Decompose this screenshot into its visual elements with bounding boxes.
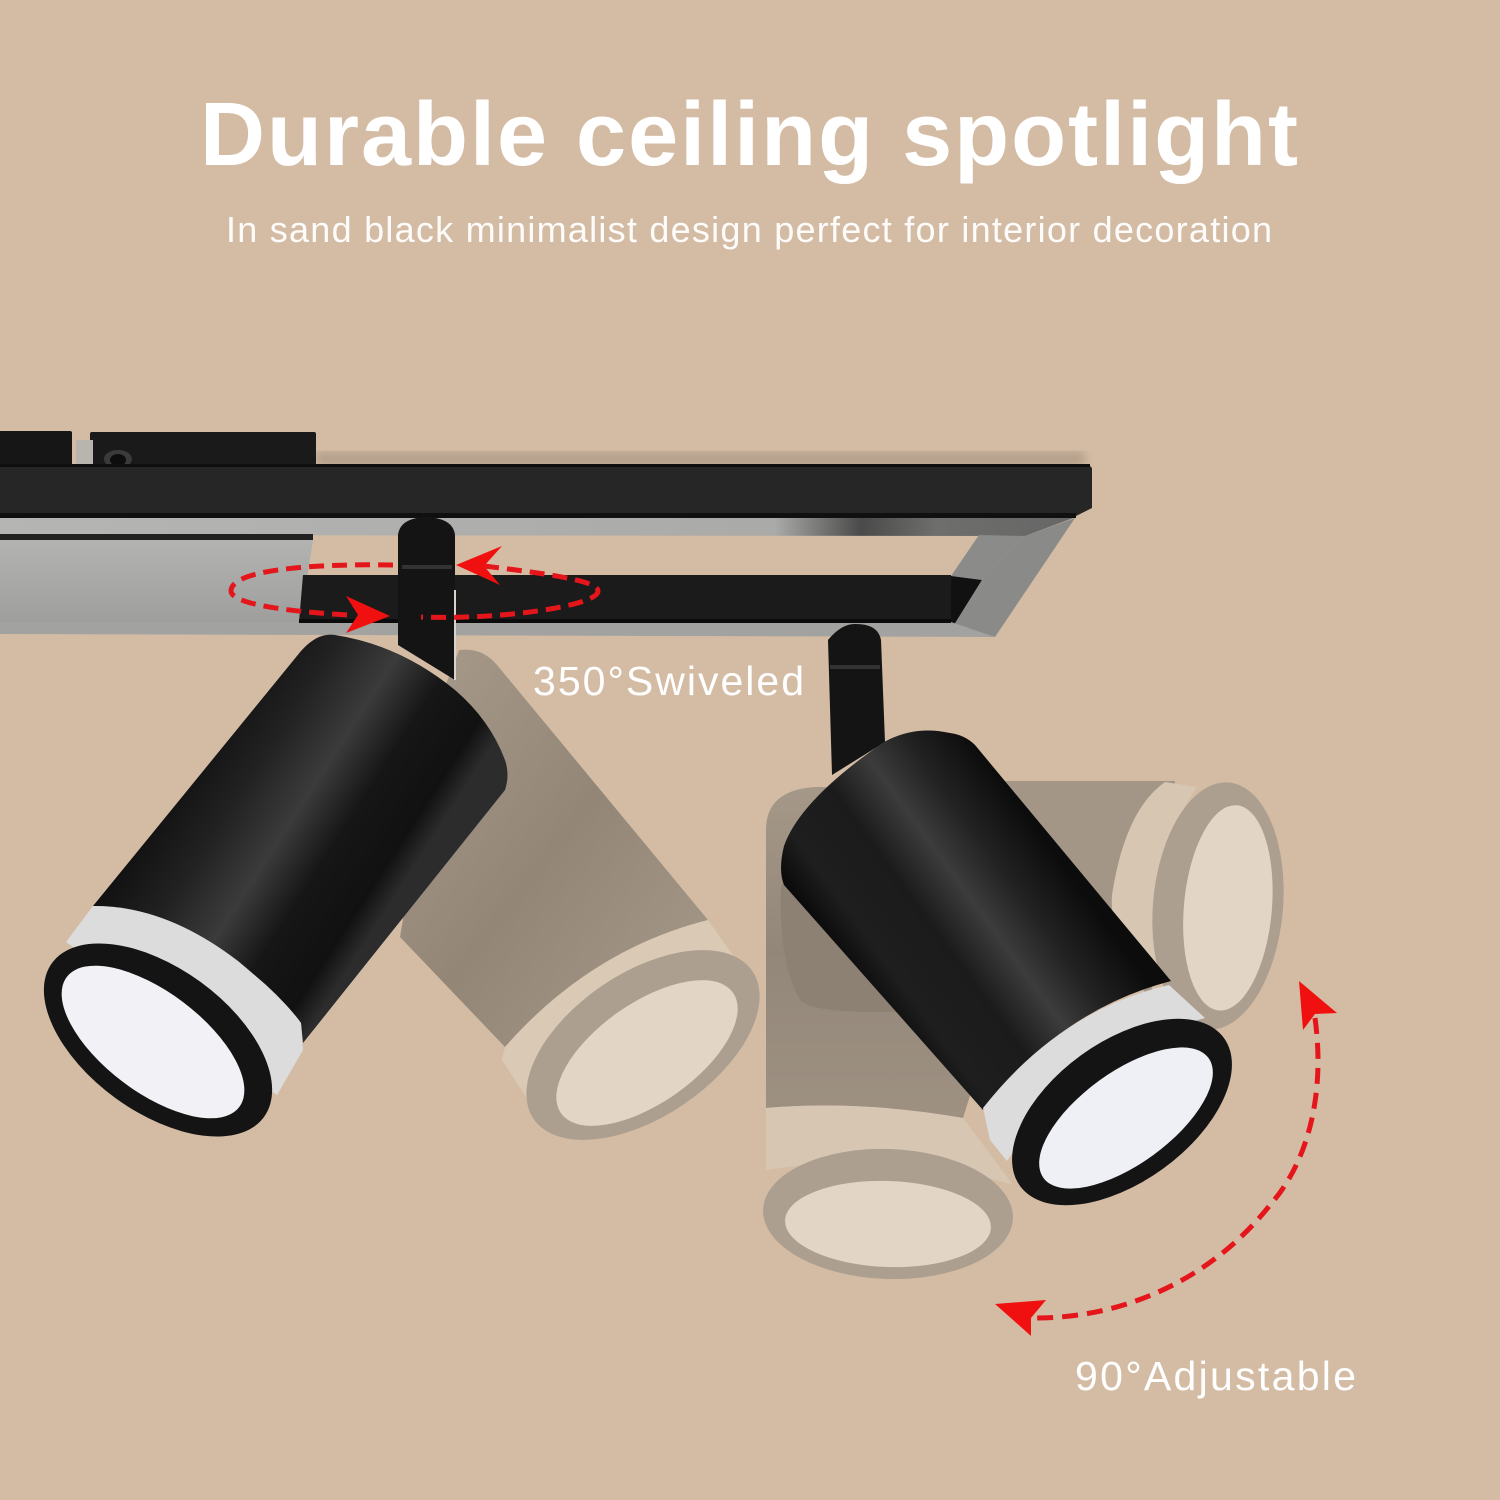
title: Durable ceiling spotlight bbox=[200, 85, 1298, 185]
tilt label: 90°Adjustable bbox=[1075, 1353, 1356, 1399]
ghost spotlight: lowered position bbox=[761, 787, 1015, 1283]
ghost spotlight: raised position bbox=[1003, 777, 1294, 1035]
ghost spotlight: swivelled position bbox=[400, 650, 793, 1179]
ceiling frame bbox=[0, 431, 1092, 637]
under strip and side bbox=[0, 517, 1076, 536]
spotlight: left bbox=[10, 635, 507, 1175]
tilt arrow: 90 adjust bbox=[995, 981, 1337, 1336]
lower bar bbox=[299, 575, 951, 622]
top bar bbox=[0, 464, 1092, 517]
subtitle: In sand black minimalist design perfect for interior decoration bbox=[226, 209, 1272, 250]
rotation arrow: 350 swivel bbox=[231, 546, 598, 633]
wall shadow bbox=[315, 452, 1085, 466]
swivel arm: left spotlight bbox=[398, 517, 456, 680]
left panel bbox=[0, 535, 313, 632]
spotlight: right bbox=[781, 730, 1265, 1243]
rotation label: 350°Swiveled bbox=[533, 658, 804, 704]
mounting bracket bbox=[0, 431, 316, 468]
swivel arm: right spotlight bbox=[828, 624, 885, 775]
